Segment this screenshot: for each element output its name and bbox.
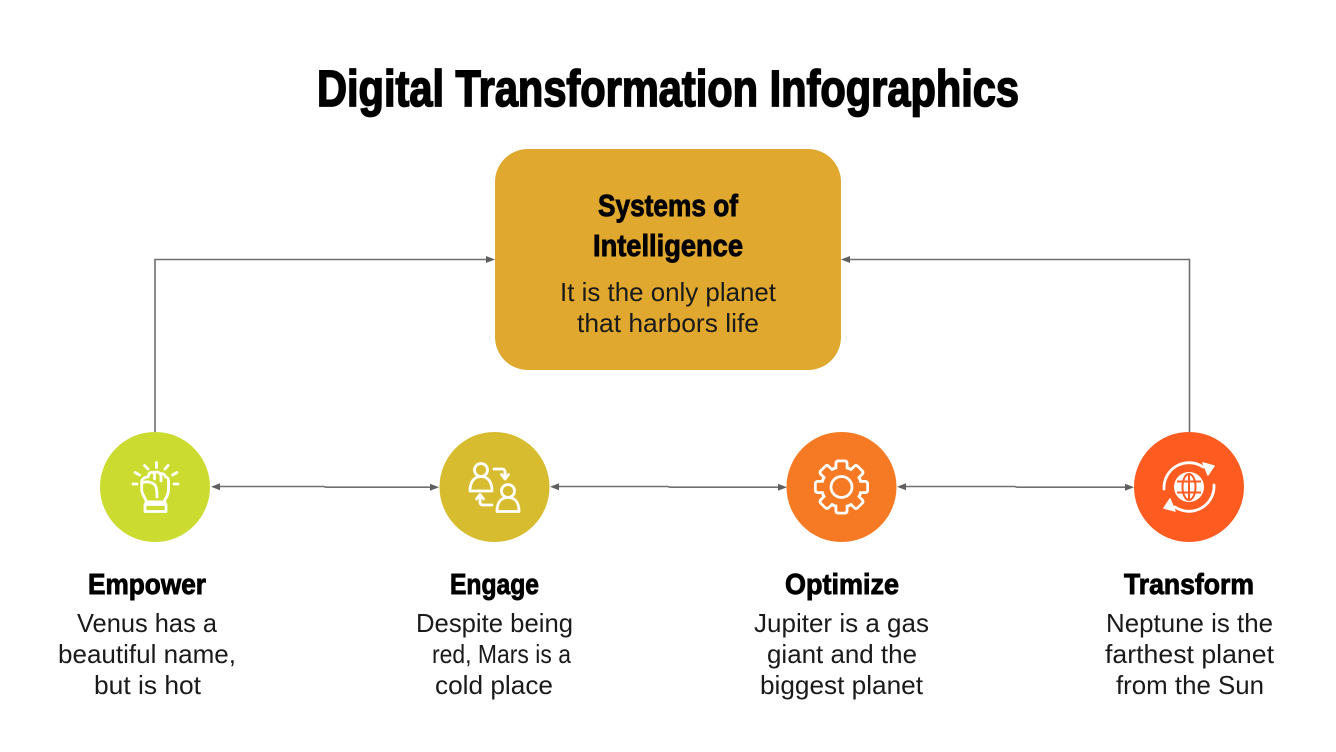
icon: people exchanging — [470, 464, 519, 512]
heading: Systems of Intelligence: Intelligence — [593, 228, 743, 263]
circle: Optimize — [786, 432, 896, 542]
arrow: Transform to Systems of Intelligence — [841, 256, 1190, 432]
text: Transform description — [1105, 608, 1275, 700]
heading: Engage: Engage — [450, 569, 539, 601]
text: Systems of Intelligence description: It is the only planet — [560, 277, 777, 307]
circle: Empower — [100, 432, 210, 542]
text: Systems of Intelligence description: that harbors life — [577, 308, 759, 338]
text: Engage description: Despite being — [416, 608, 573, 638]
text: Empower description: beautiful name, — [58, 639, 236, 669]
text: Systems of Intelligence description — [560, 277, 777, 338]
text: Transform description: farthest planet — [1105, 639, 1275, 669]
label: Optimize — [754, 569, 929, 700]
text: Empower description: but is hot — [94, 670, 202, 700]
arrow: Optimize and Transform — [897, 483, 1134, 491]
circle: Engage — [440, 432, 550, 542]
heading: Systems of Intelligence: Systems of — [598, 188, 739, 223]
text: Empower description: Venus has a — [77, 608, 218, 638]
label: Transform — [1105, 569, 1275, 700]
panel: Systems of Intelligence — [495, 149, 841, 370]
text: Optimize description: biggest planet — [760, 670, 924, 700]
icon: gear — [814, 460, 869, 514]
heading: Transform: Transform — [1124, 569, 1254, 601]
heading: Empower: Empower — [88, 569, 206, 601]
text: Engage description: cold place — [435, 670, 553, 700]
arrow: Empower and Engage — [211, 483, 439, 491]
text: Empower description — [58, 608, 236, 700]
title: Digital Transformation Infographics — [317, 60, 1019, 117]
arrow: Engage and Optimize — [550, 483, 787, 491]
circle: Transform — [1134, 432, 1244, 542]
arrow: Empower to Systems of Intelligence — [155, 256, 495, 432]
icon: raised fist — [133, 462, 178, 512]
text: Optimize description: Jupiter is a gas — [754, 608, 929, 638]
text: Transform description: from the Sun — [1116, 670, 1264, 700]
heading: Systems of Intelligence — [593, 188, 743, 263]
text: Engage description — [416, 608, 573, 700]
icon: globe with rotating arrows — [1164, 463, 1214, 511]
text: Transform description: Neptune is the — [1106, 608, 1273, 638]
text: Optimize description: giant and the — [767, 639, 917, 669]
label: Empower — [58, 569, 236, 700]
heading: Optimize: Optimize — [785, 569, 899, 601]
text: Engage description: red, Mars is a — [432, 639, 571, 669]
label: Engage — [416, 569, 573, 700]
text: Optimize description — [754, 608, 929, 700]
